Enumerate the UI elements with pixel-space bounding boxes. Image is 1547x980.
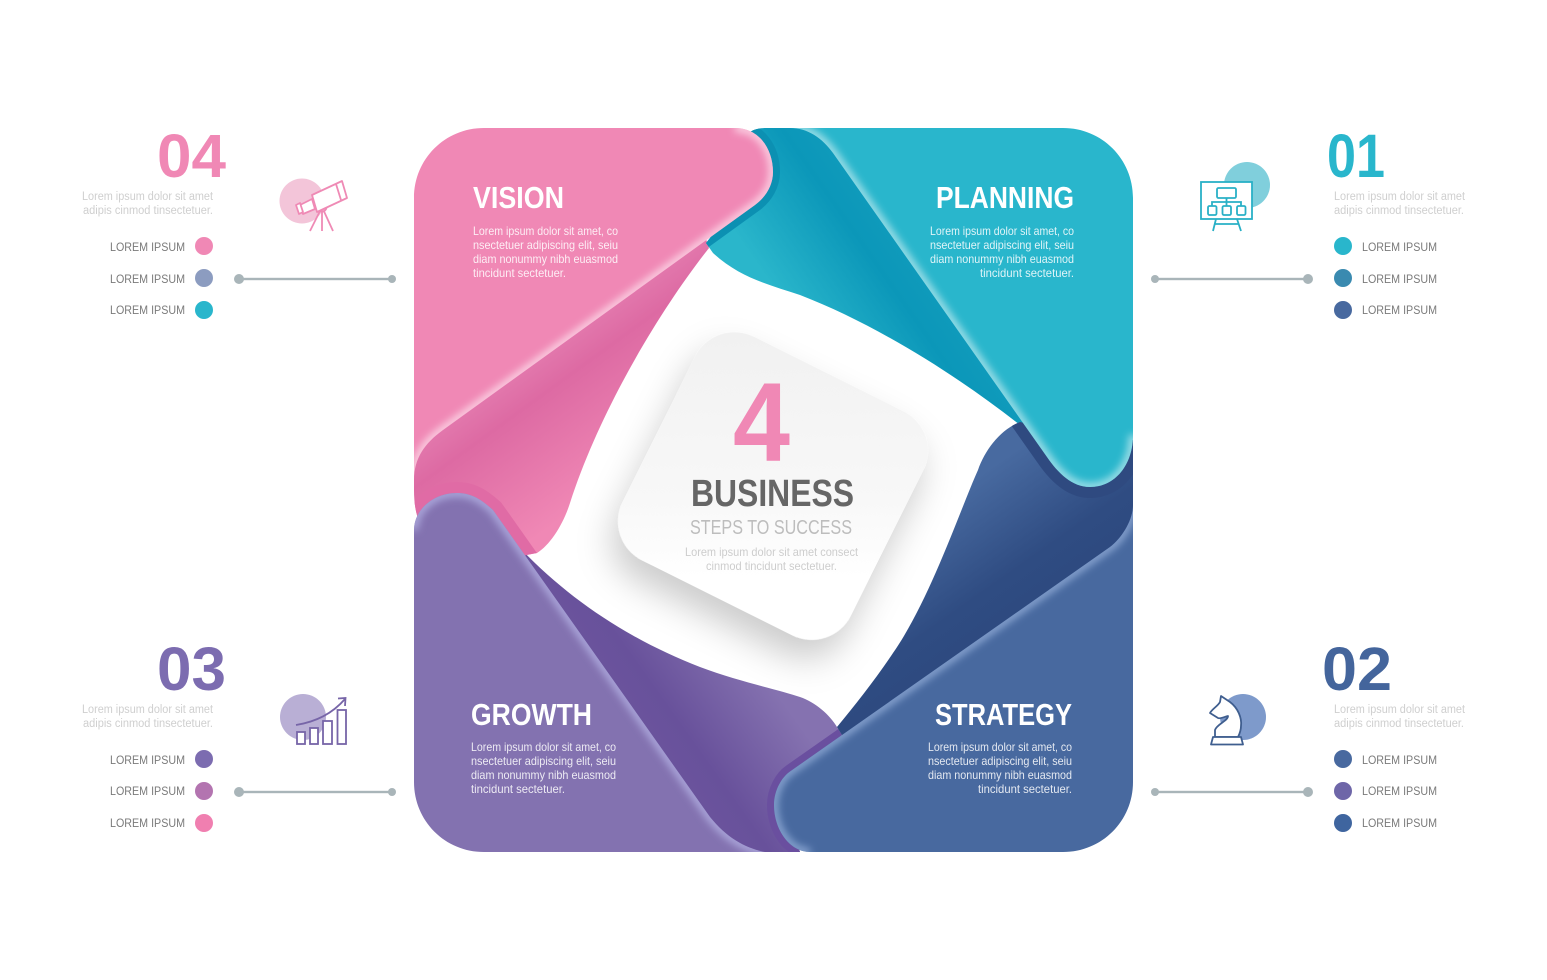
- heading: strategy: STRATEGY: [935, 697, 1072, 732]
- connector 02: [1151, 787, 1313, 797]
- text: description 04: adipis cinmod tinsectetuer.: [83, 205, 213, 217]
- text: planning body: Lorem ipsum dolor sit amet, co: [930, 224, 1074, 238]
- legend 02: LOREM IPSUM: [1362, 784, 1437, 798]
- text: growth body: Lorem ipsum dolor sit amet, co: [471, 740, 616, 754]
- text: vision body: nsectetuer adipiscing elit, seiu: [473, 238, 618, 252]
- text: description 03: Lorem ipsum dolor sit amet: [82, 704, 214, 716]
- connector 03: [234, 787, 396, 797]
- icon: telescope: [280, 178, 347, 231]
- text: growth body: [471, 740, 616, 796]
- legend 01: LOREM IPSUM: [1362, 240, 1437, 254]
- infographic canvas: [82, 128, 1465, 852]
- text: vision body: diam nonummy nibh euasmod: [473, 252, 618, 266]
- text: growth body: diam nonummy nibh euasmod: [471, 768, 616, 782]
- legend 04: LOREM IPSUM: [110, 272, 185, 286]
- icon: org chart board: [1201, 162, 1270, 231]
- text: planning body: [930, 224, 1074, 280]
- center card: 4 business steps to success: 4: [733, 360, 790, 485]
- heading: growth: GROWTH: [471, 697, 592, 732]
- text: strategy body: diam nonummy nibh euasmod: [928, 768, 1072, 782]
- legend 04: LOREM IPSUM: [110, 240, 185, 254]
- text: vision body: tincidunt sectetuer.: [473, 266, 566, 280]
- icon: chess knight: [1210, 694, 1266, 744]
- text: strategy body: [928, 740, 1072, 796]
- text: strategy body: Lorem ipsum dolor sit amet, co: [928, 740, 1072, 754]
- panel: vision: [414, 128, 773, 480]
- center card: 4 business steps to success: cinmod tincidunt sectetuer.: [706, 559, 837, 573]
- text: description 02: adipis cinmod tinsectetuer.: [1334, 718, 1464, 730]
- text: description 01: adipis cinmod tinsectetuer.: [1334, 205, 1464, 217]
- legend 03: [110, 750, 213, 832]
- panel: growth: [414, 493, 765, 852]
- legend 03: LOREM IPSUM: [110, 816, 185, 830]
- panel: side info 04: [82, 122, 396, 319]
- text: growth body: nsectetuer adipiscing elit, seiu: [471, 754, 616, 768]
- number 03: 03: [157, 635, 226, 703]
- text: growth body: tincidunt sectetuer.: [471, 782, 565, 796]
- panel: side info 01: [1151, 122, 1466, 319]
- panel: planning: [790, 128, 1133, 487]
- legend 04: LOREM IPSUM: [110, 303, 185, 317]
- text: planning body: diam nonummy nibh euasmod: [930, 252, 1074, 266]
- legend 02: [1334, 750, 1437, 832]
- connector 01: [1151, 274, 1313, 284]
- fold: strategy back: [837, 422, 1133, 735]
- text: vision body: [473, 224, 618, 280]
- text: description 02: Lorem ipsum dolor sit amet: [1334, 704, 1466, 716]
- icon: growth chart: [280, 694, 346, 744]
- text: description 04: [82, 191, 214, 217]
- text: vision body: Lorem ipsum dolor sit amet, co: [473, 224, 618, 238]
- legend 02: LOREM IPSUM: [1362, 816, 1437, 830]
- fold: vision back: [414, 240, 709, 556]
- text: description 04: Lorem ipsum dolor sit amet: [82, 191, 214, 203]
- legend 01: LOREM IPSUM: [1362, 303, 1437, 317]
- text: planning body: tincidunt sectetuer.: [980, 266, 1074, 280]
- legend 01: LOREM IPSUM: [1362, 272, 1437, 286]
- center card: 4 business steps to success: Lorem ipsum dolor sit amet consect: [685, 545, 859, 559]
- legend 03: LOREM IPSUM: [110, 753, 185, 767]
- text: description 01: Lorem ipsum dolor sit amet: [1334, 191, 1466, 203]
- panel: strategy: [774, 505, 1133, 852]
- text: description 01: [1334, 191, 1466, 217]
- number 01: 01: [1327, 122, 1385, 190]
- center card: 4 business steps to success: [603, 317, 943, 655]
- legend 03: LOREM IPSUM: [110, 784, 185, 798]
- text: description 03: adipis cinmod tinsectetuer.: [83, 718, 213, 730]
- center card: 4 business steps to success: STEPS TO SUCCESS: [690, 517, 852, 539]
- text: description 03: [82, 704, 214, 730]
- text: strategy body: nsectetuer adipiscing elit, seiu: [928, 754, 1072, 768]
- legend 02: LOREM IPSUM: [1362, 753, 1437, 767]
- number 04: 04: [157, 122, 226, 190]
- fold: growth back: [525, 555, 842, 852]
- heading: planning: PLANNING: [936, 180, 1074, 215]
- text: strategy body: tincidunt sectetuer.: [978, 782, 1072, 796]
- connector 04: [234, 274, 396, 284]
- number 02: 02: [1322, 635, 1392, 703]
- text: planning body: nsectetuer adipiscing elit, seiu: [930, 238, 1074, 252]
- center card: 4 business steps to success: BUSINESS: [691, 473, 854, 515]
- panel: side info 03: [82, 635, 396, 832]
- fold: planning back: [706, 128, 1023, 423]
- legend 01: [1334, 237, 1437, 319]
- panel: side info 02: [1151, 635, 1466, 832]
- heading: vision: VISION: [473, 180, 564, 215]
- legend 04: [110, 237, 213, 319]
- text: description 02: [1334, 704, 1466, 730]
